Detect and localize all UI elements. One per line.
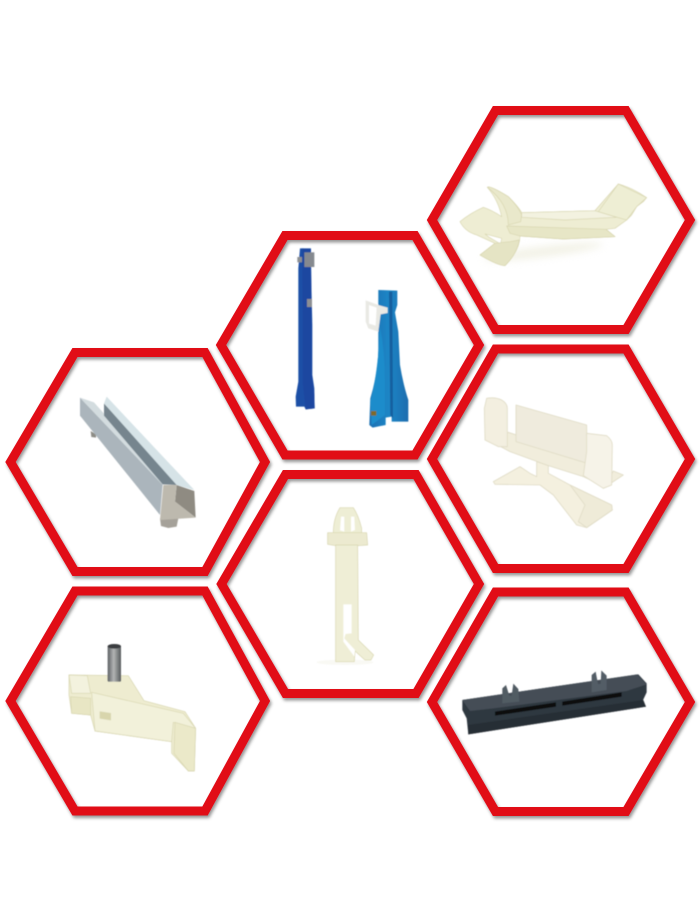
hexagon frame xyxy=(432,592,690,812)
product: slim dark blue tool xyxy=(296,248,315,409)
panel: blue tools xyxy=(221,236,479,455)
product: grey V channel rail xyxy=(80,397,196,528)
product: barbed cream clip xyxy=(460,184,647,266)
hexagon frame xyxy=(10,591,265,811)
panel: long latch xyxy=(222,474,479,694)
product: wide light blue tool with white tab xyxy=(366,290,408,428)
panel: top right clip xyxy=(432,110,690,330)
hexagon frame xyxy=(222,474,479,694)
hexagon frame xyxy=(432,110,690,330)
product: dark slotted rail with two clips xyxy=(462,670,647,734)
product: cream bracket with steel pin xyxy=(69,644,196,771)
product: cream snap latch post xyxy=(317,508,374,665)
hexagon frame xyxy=(10,352,265,572)
hexagon frame xyxy=(221,236,479,455)
product: white card holder clip xyxy=(484,398,623,528)
panel: grey channel xyxy=(10,352,265,572)
panel: white holder xyxy=(432,349,690,568)
panel: pin bracket xyxy=(10,591,265,811)
panel: black rail xyxy=(432,592,690,812)
hexagon frame xyxy=(432,349,690,568)
